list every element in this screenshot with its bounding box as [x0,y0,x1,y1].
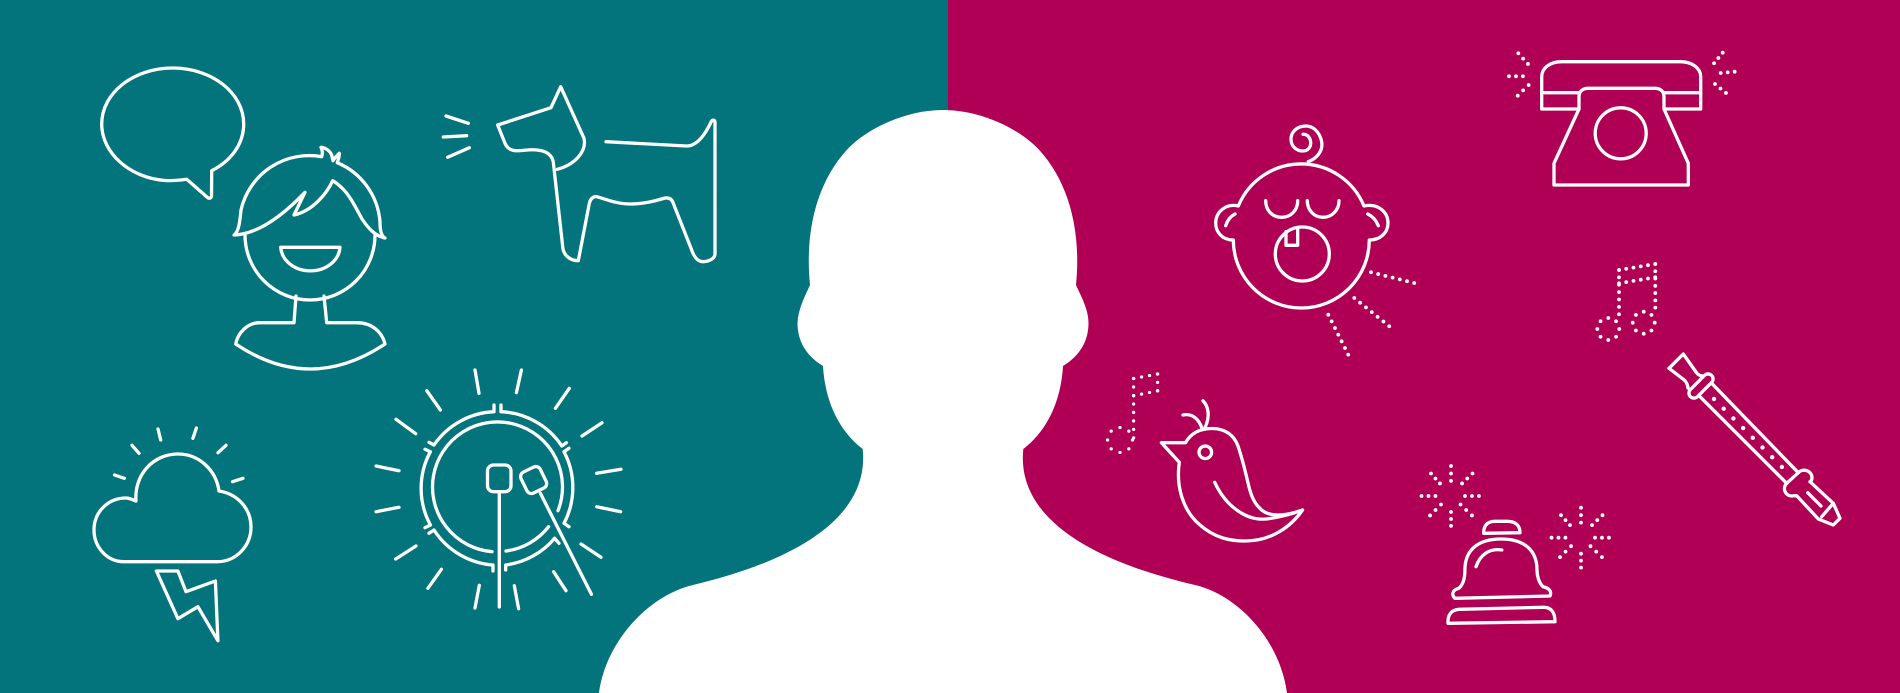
icon: bell sparkle left [1422,466,1479,526]
icon: crying baby [1216,126,1414,355]
panel: magenta right background [948,0,1900,693]
icon: thunder cloud [94,428,251,641]
icon: smiling person [234,147,385,369]
icon: recorder flute [1669,354,1840,525]
icon: ringing telephone [1509,53,1735,185]
icon: singing bird [1161,401,1302,541]
icon: bell sparkle right [1552,508,1609,568]
panel: teal left background [0,0,948,693]
icon: dotted note by bird [1108,374,1158,452]
icon: speech bubble [102,68,244,198]
person silhouette [599,110,1287,693]
icon: dotted music note [1597,264,1655,340]
icon: service bell [1448,521,1555,623]
icon: drum with sticks [376,370,621,609]
icon: dog barking [443,87,715,262]
